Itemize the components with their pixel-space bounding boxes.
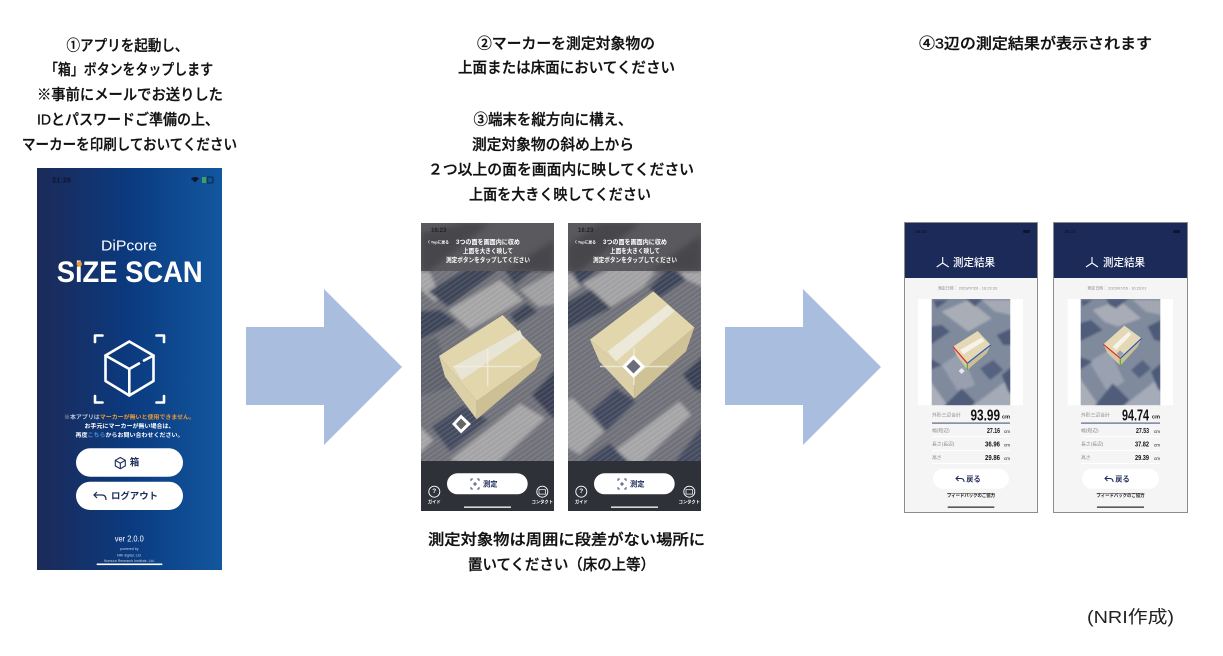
height row: cm [1154, 456, 1160, 461]
guide icon: ? [432, 488, 436, 495]
top overlay band [568, 223, 701, 271]
heading: step 2 instructions: ②マーカーを測定対象物の [477, 34, 655, 52]
alignment crosshair [453, 349, 521, 386]
height row [932, 454, 1010, 464]
icon: box in scan frame [95, 336, 164, 402]
heading: step 2 instructions: 上面または床面においてください [458, 60, 675, 76]
guidance text: 3つの面を画面内に収め [456, 237, 520, 246]
result header [905, 223, 1037, 278]
guidance text: 上面を大きく映して [463, 246, 513, 255]
width row: 幅(短辺) [1081, 427, 1099, 434]
credits: Nomura Research Institute, Ltd. [104, 559, 155, 563]
status time: 16:23 [431, 228, 447, 234]
notice text: 再度こちらからお問い合わせください。 [76, 431, 184, 439]
total row: cm [1002, 414, 1010, 420]
carpet floor [421, 271, 554, 461]
guidance text: 測定ボタンをタップしてください [446, 255, 531, 264]
result header: 測定結果 [1103, 255, 1145, 269]
guidance text: 3つの面を画面内に収め [603, 237, 667, 246]
home indicator [97, 564, 162, 565]
logo: DiPcore: DiPcore [101, 238, 157, 254]
contact icon: コンタクト [532, 498, 553, 506]
alignment crosshair [600, 348, 668, 385]
notice text: ※本アプリはマーカーが無いと使用できません。 [64, 413, 195, 421]
result header [1054, 223, 1187, 278]
home indicator [1097, 506, 1144, 508]
measure button [447, 473, 528, 494]
guidance text [593, 237, 678, 264]
total row: 外形三辺合計 [1081, 412, 1110, 418]
notice text [64, 413, 195, 439]
width row: 27.16 [987, 428, 1000, 435]
length row: 長さ(長辺) [932, 440, 955, 448]
AR marker [622, 355, 645, 378]
phone screen: measuring box, right [568, 223, 701, 511]
back button: 戻る [1115, 474, 1130, 484]
heading: step 1 instructions [22, 38, 237, 154]
carpet floor [568, 271, 701, 461]
status bar [52, 176, 213, 184]
guidance text: 測定ボタンをタップしてください [593, 255, 678, 264]
AR marker [452, 414, 471, 434]
heading: step 3 instructions [428, 110, 694, 204]
phone screen: measuring box, left [421, 223, 554, 511]
total row: 外形三辺合計 [932, 412, 961, 418]
length row: cm [1154, 442, 1160, 448]
heading: step 1 instructions: ※事前にメールでお送りした [37, 86, 223, 104]
back link: 〈 Topに戻る [426, 240, 449, 244]
width row [932, 427, 1010, 437]
arrow: step 3 to step 4 [725, 289, 881, 445]
heading: step 1 instructions: 「箱」ボタンをタップします [45, 62, 213, 78]
result screen: 94.74 cm [1054, 222, 1188, 512]
height row: 29.39 [1135, 455, 1149, 462]
heading: step 1 instructions: ①アプリを起動し、 [66, 38, 188, 54]
result header: 測定結果 [953, 255, 995, 269]
note: placement caption: 置いてください（床の上等） [468, 556, 655, 574]
length row: 36.96 [985, 442, 1000, 448]
height row: cm [1004, 456, 1010, 461]
notice text: お手元にマーカーが無い場合は、 [84, 422, 174, 430]
measure button: 測定 [483, 480, 498, 488]
credits: powered by [120, 547, 139, 551]
guide icon: ? [579, 488, 583, 495]
width row: 27.53 [1136, 428, 1149, 435]
cardboard box [590, 291, 694, 399]
feedback link: フィードバックのご協力 [947, 492, 995, 499]
total row [1081, 408, 1160, 424]
guidance text [446, 237, 531, 264]
note: placement caption [428, 530, 705, 574]
arrow: step 1 to step 2 [246, 289, 402, 445]
length row: 37.82 [1135, 442, 1149, 448]
feedback link: フィードバックのご協力 [1096, 492, 1145, 499]
width row: 幅(短辺) [932, 427, 950, 434]
height row: 高さ [932, 454, 942, 461]
total row: cm [1152, 414, 1160, 420]
guide icon: ガイド [575, 498, 588, 506]
phone screen: app launch [37, 168, 222, 570]
heading: step 3 instructions: 測定対象物の斜め上から [472, 136, 634, 154]
source credit: (NRI作成) [1087, 607, 1174, 627]
back button [933, 469, 1009, 489]
length row [1081, 440, 1160, 451]
home indicator [948, 506, 994, 508]
bottom overlay band [568, 461, 701, 511]
guide icon [575, 486, 588, 506]
total row: 94.74 [1122, 408, 1149, 424]
width row: cm [1004, 429, 1010, 434]
button: logout: ログアウト [111, 490, 158, 501]
total row [932, 408, 1010, 424]
heading: step 3 instructions: ③端末を縦方向に構え、 [474, 110, 632, 128]
guide icon [428, 486, 441, 506]
contact icon [532, 486, 553, 506]
measure button [594, 473, 675, 494]
measure button: 測定 [630, 480, 645, 488]
length row: 長さ(長辺) [1081, 440, 1104, 448]
home indicator [611, 506, 658, 508]
status time: 16:23 [578, 228, 594, 234]
heading: step 2 instructions [458, 34, 675, 76]
button: box [76, 448, 183, 477]
result screen: 93.99 cm [904, 222, 1038, 512]
back link: 〈 Topに戻る [573, 240, 596, 244]
contact icon [679, 486, 700, 506]
home indicator [464, 506, 511, 508]
timestamp: 測定日時： 2023/07/26 · 16:23:33 [938, 286, 997, 290]
width row: cm [1154, 429, 1160, 434]
credits [104, 547, 155, 563]
status bar: 21:26 [52, 176, 71, 184]
heading: step 3 instructions: 上面を大きく映してください [469, 186, 651, 204]
note: placement caption: 測定対象物は周囲に段差がない場所に [428, 530, 705, 548]
height row: 29.86 [985, 455, 1000, 462]
measurement photo [918, 297, 1023, 407]
logo: SIZE SCAN: SiZE SCAN [57, 256, 203, 289]
height row: 高さ [1081, 454, 1091, 461]
credits: NRI digital, Ltd. [117, 553, 142, 557]
back button [1082, 469, 1159, 489]
back button: 戻る [966, 474, 981, 484]
heading: step 1 instructions: IDとパスワードご準備の上、 [37, 110, 219, 128]
cardboard box [439, 315, 542, 419]
button: logout [76, 482, 183, 510]
version: ver 2.0.0 [115, 533, 144, 543]
bottom overlay band [421, 461, 554, 511]
width row [1081, 427, 1160, 437]
button: box: 箱 [130, 456, 140, 468]
timestamp: 測定日時： 2023/07/26 · 16:23:01 [1088, 286, 1146, 290]
heading: step 1 instructions: マーカーを印刷しておいてください [22, 136, 237, 154]
height row [1081, 454, 1160, 464]
guidance text: 上面を大きく映して [610, 246, 660, 255]
heading: step 4: ④3辺の測定結果が表示されます [919, 34, 1152, 52]
total row: 93.99 [970, 408, 1000, 424]
result header: 16:23 [915, 229, 927, 234]
guide icon: ガイド [428, 498, 441, 506]
measurement photo [1068, 297, 1173, 407]
result header: 16:23 [1064, 229, 1076, 234]
length row: cm [1004, 442, 1010, 448]
top overlay band [421, 223, 554, 271]
contact icon: コンタクト [679, 498, 700, 506]
length row [932, 440, 1010, 451]
heading: step 3 instructions: ２つ以上の面を画面内に映してください [428, 162, 694, 178]
